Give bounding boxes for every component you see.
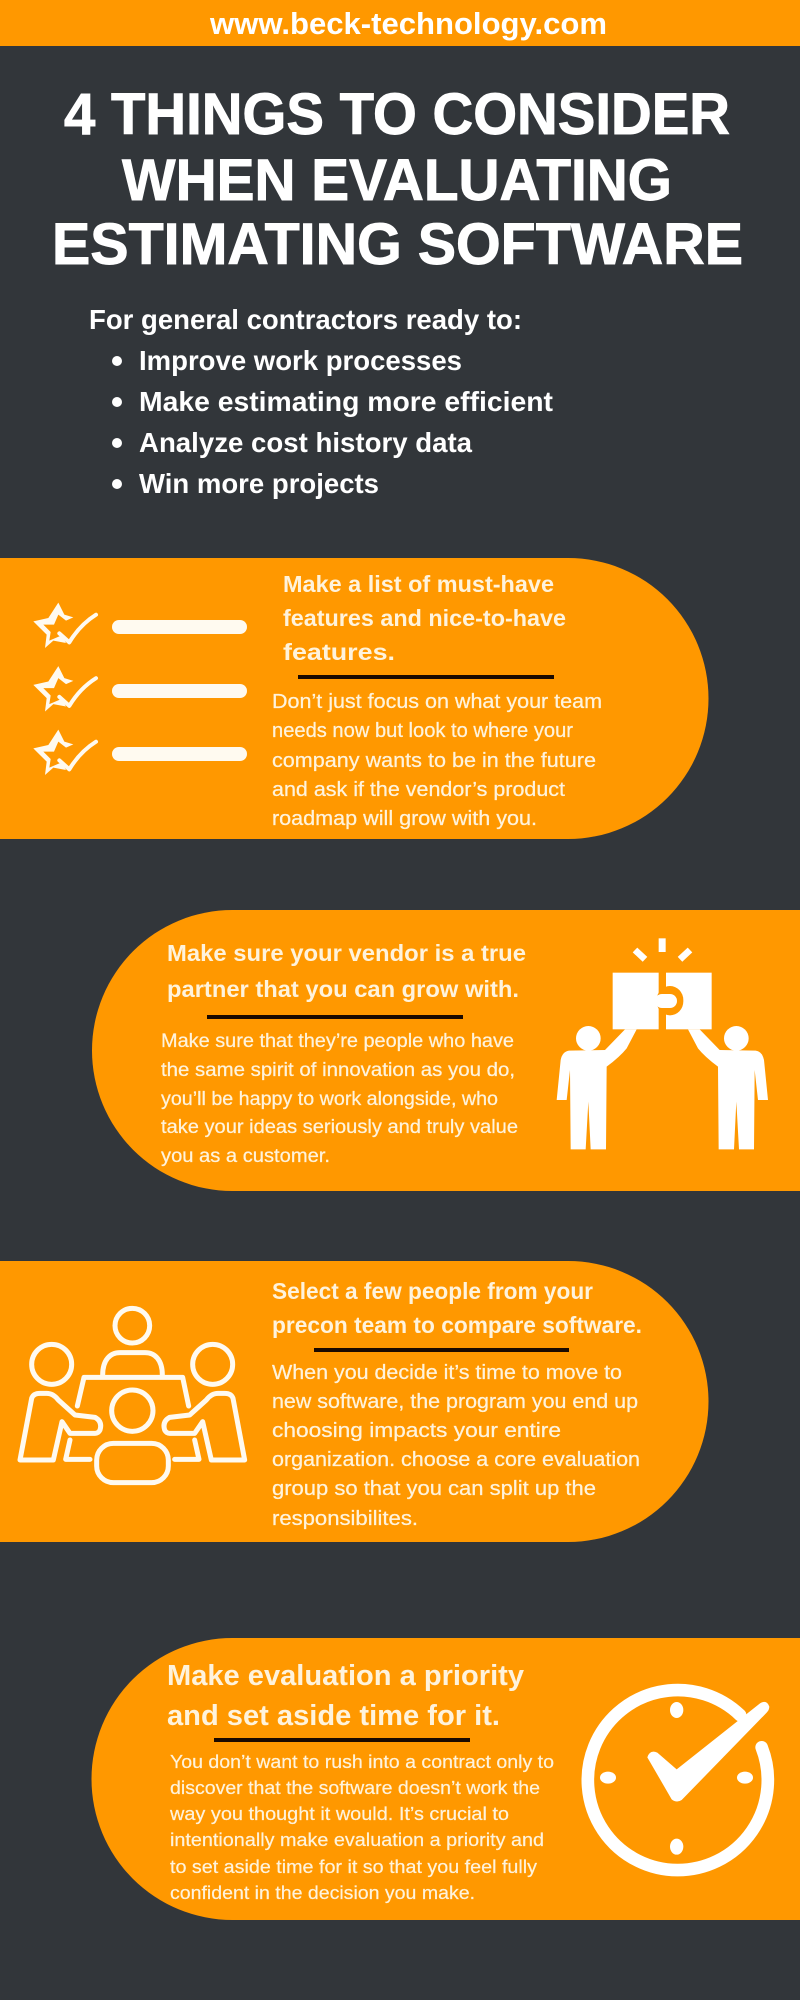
icon: clock with check mark xyxy=(588,1690,769,1870)
heading: and set aside time for it. xyxy=(167,1700,500,1732)
heading: Make sure your vendor is a true xyxy=(167,940,526,966)
icon: star checklist xyxy=(33,603,247,775)
body text xyxy=(169,1751,554,1903)
body text: to set aside time for it so that you feel fully xyxy=(170,1856,538,1877)
body text: way you thought it would. It’s crucial to xyxy=(169,1803,509,1824)
body text: intentionally make evaluation a priority and xyxy=(170,1829,544,1850)
heading xyxy=(167,1660,524,1732)
body text: Don’t just focus on what your team xyxy=(272,691,602,713)
header banner: www.beck-technology.com xyxy=(209,6,607,41)
body text: take your ideas seriously and truly value xyxy=(161,1117,518,1138)
heading xyxy=(272,1278,642,1338)
heading xyxy=(167,940,526,1002)
body text: You don’t want to rush into a contract only to xyxy=(170,1751,554,1772)
body text: responsibilites. xyxy=(272,1508,418,1530)
heading: Make evaluation a priority xyxy=(167,1660,524,1692)
panel: true partner vendor xyxy=(92,910,800,1191)
intro text and bullet list xyxy=(89,304,553,499)
body text xyxy=(272,1362,640,1530)
body text: new software, the program you end up xyxy=(272,1391,638,1413)
title: WHEN EVALUATING xyxy=(122,148,672,213)
intro text and bullet list: Make estimating more efficient xyxy=(139,386,553,417)
body text: choosing impacts your entire xyxy=(272,1420,561,1442)
heading: features and nice-to-have xyxy=(283,605,566,631)
heading: Select a few people from your xyxy=(272,1278,593,1304)
body text: Make sure that they’re people who have xyxy=(161,1031,514,1052)
panel: must-have features xyxy=(0,558,708,839)
heading: partner that you can grow with. xyxy=(167,976,519,1002)
heading: Make a list of must-have xyxy=(283,571,554,597)
body text: needs now but look to where your xyxy=(272,720,573,742)
title: 4 THINGS TO CONSIDER xyxy=(64,82,730,147)
title: ESTIMATING SOFTWARE xyxy=(52,212,743,277)
title xyxy=(52,82,743,277)
body text: you as a customer. xyxy=(161,1146,330,1167)
body text: roadmap will grow with you. xyxy=(272,808,537,830)
body text: the same spirit of innovation as you do, xyxy=(161,1060,515,1081)
panel: core evaluation team xyxy=(0,1261,708,1542)
body text: discover that the software doesn’t work the xyxy=(170,1777,540,1798)
heading xyxy=(283,571,566,665)
body text: and ask if the vendor’s product xyxy=(272,779,565,801)
intro text and bullet list: Win more projects xyxy=(139,468,379,499)
icon: people around a meeting table xyxy=(20,1308,245,1483)
icon: two people joining puzzle pieces xyxy=(557,938,768,1149)
heading: precon team to compare software. xyxy=(272,1312,642,1338)
body text xyxy=(161,1031,518,1167)
intro text and bullet list: Analyze cost history data xyxy=(139,427,472,458)
body text xyxy=(272,691,602,830)
body text: company wants to be in the future xyxy=(272,750,596,772)
body text: you’ll be happy to work alongside, who xyxy=(161,1089,498,1110)
heading: features. xyxy=(283,639,395,665)
intro text and bullet list: For general contractors ready to: xyxy=(89,304,522,335)
intro text and bullet list: Improve work processes xyxy=(139,345,462,376)
body text: When you decide it’s time to move to xyxy=(272,1362,622,1384)
body text: confident in the decision you make. xyxy=(170,1882,475,1903)
body text: group so that you can split up the xyxy=(272,1478,596,1500)
body text: organization. choose a core evaluation xyxy=(272,1449,640,1471)
header banner xyxy=(0,0,800,46)
panel: make evaluation a priority xyxy=(92,1638,800,1920)
